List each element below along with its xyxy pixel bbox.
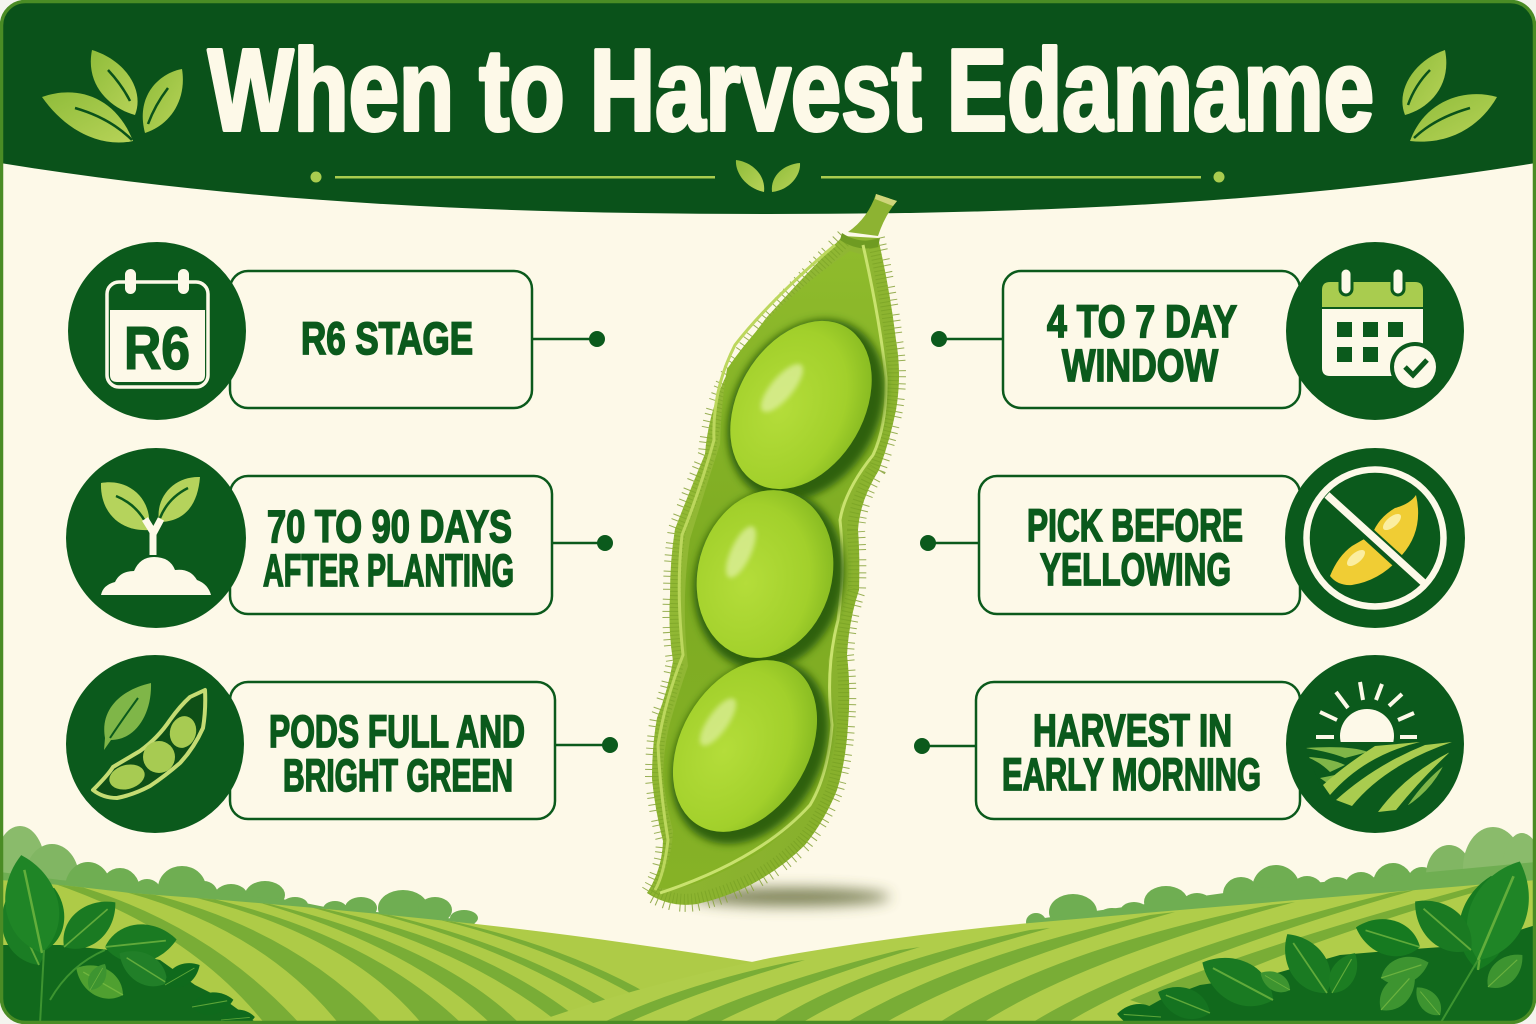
panel: pods full [230,682,555,819]
label: harvest in early morning [1003,714,1260,792]
icon: window calendar [1286,242,1464,420]
label: 70 to 90 days after planting [262,509,513,588]
label: pods full and bright green [270,714,524,792]
label: harvest in early morning: EARLY MORNING [1002,749,1261,800]
connector: 4 to 7 day [931,331,1003,347]
label: 4 to 7 day window [1046,304,1238,382]
foliage: bottom left [0,850,258,1024]
pod shell [647,236,899,905]
panel: 70 to 90 days [230,476,552,614]
pod shadow [690,888,890,906]
bean: bottom [644,634,846,858]
icon: R6 calendar [68,242,246,420]
label: pick before yellowing: YELLOWING [1040,544,1231,595]
icon: pod and leaf [66,655,244,833]
header banner [0,0,1536,214]
label: pick before yellowing: PICK BEFORE [1027,500,1243,551]
label: harvest in early morning: HARVEST IN [1033,705,1232,756]
bean: top [701,296,901,514]
bean shadows [696,291,916,529]
label: 4 to 7 day window: 4 TO 7 DAY [1047,296,1237,347]
connector: pods full [555,737,618,753]
label: pods full and bright green: PODS FULL AND [269,706,525,757]
rim fibre texture [647,236,899,905]
connector: pick before [920,535,979,551]
landscape: left striped field [3,880,752,1021]
seam highlights [660,245,886,893]
icon: R6 calendar: R6 [124,315,190,382]
connector: harvest in [914,738,976,754]
icon: header leaves right [1402,50,1497,142]
bean: middle [678,475,852,673]
stem [848,194,897,236]
icon: sprout [66,448,246,628]
panel: 4 to 7 day window [1003,271,1300,408]
knot at stem base [840,233,880,248]
connector: 70 to 90 days [552,535,613,551]
icon: no yellow pods [1285,448,1465,628]
icon: sunrise over field [1286,655,1464,833]
label: 70 to 90 days after planting: 70 TO 90 DAYS [267,501,512,552]
landscape: right hedgerow [1026,827,1536,931]
label: pods full and bright green: BRIGHT GREEN [283,750,513,801]
pod hairs [647,236,899,905]
label: 4 to 7 day window: WINDOW [1062,340,1218,391]
illustration: edamame pod [640,194,916,905]
panel: harvest in early morning [976,682,1300,819]
label: 70 to 90 days after planting: AFTER PLANTING [263,545,514,596]
pod cavity [657,251,883,888]
panel: R6 stage [230,271,532,408]
landscape: left hedgerow [0,826,478,926]
landscape: right striped field [551,880,1533,1021]
label: pick before yellowing [1028,508,1242,586]
label: R6 stage: R6 STAGE [301,313,473,364]
foliage: bottom right [1116,851,1536,1024]
header divider [310,160,1224,192]
connector: R6 stage [532,331,605,347]
icon: header leaves left [42,50,183,142]
panel: pick before yellowing [979,476,1300,614]
